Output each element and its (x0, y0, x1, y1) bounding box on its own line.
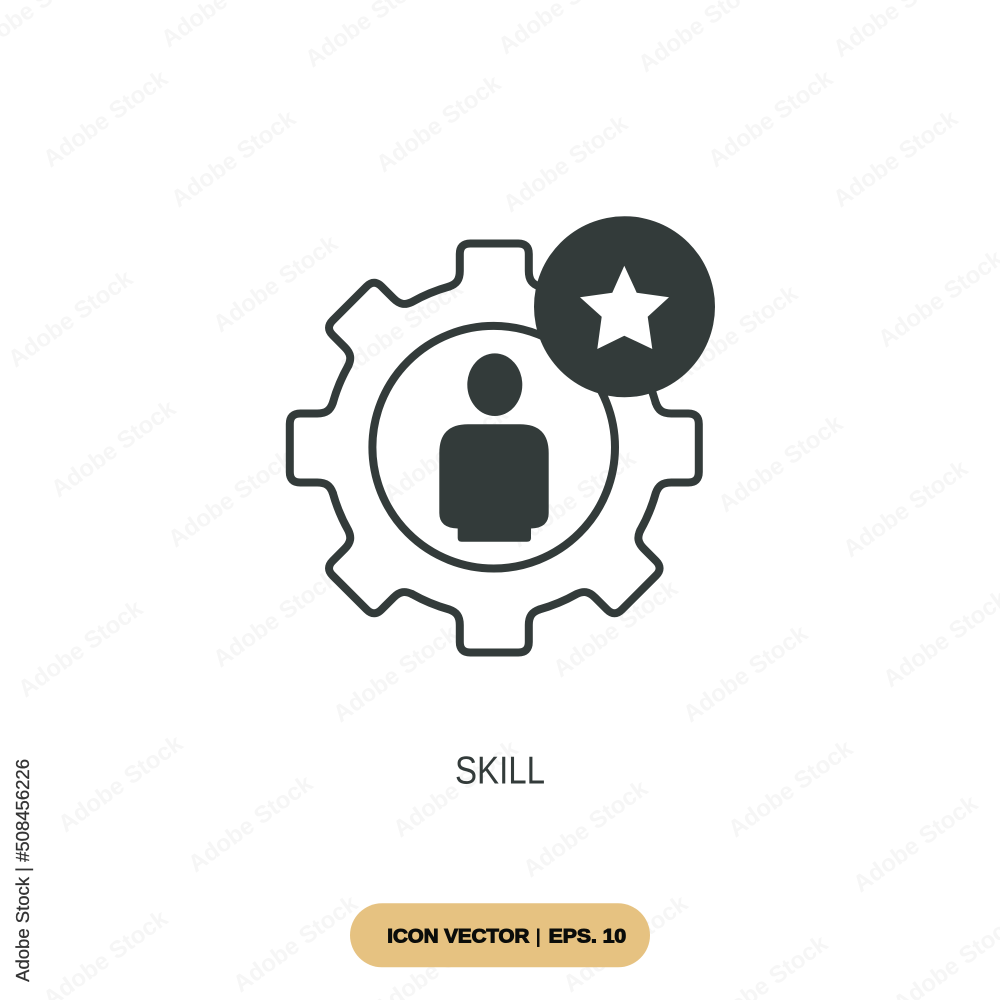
watermark pattern: Adobe Stock (540, 240, 675, 348)
watermark pattern: Adobe Stock (828, 105, 963, 213)
watermark pattern: Adobe Stock (53, 730, 188, 838)
person head (467, 353, 522, 416)
watermark pattern: Adobe Stock (3, 265, 138, 373)
pill text right: EPS. 10 (549, 925, 626, 947)
icon: gear outline (290, 244, 699, 652)
watermark pattern: Adobe Stock (558, 890, 693, 998)
watermark pattern: Adobe Stock (228, 890, 363, 998)
watermark pattern: Adobe Stock (678, 620, 813, 728)
pill separator: | (536, 925, 541, 947)
watermark pattern: Adobe Stock (498, 110, 633, 218)
watermark pattern: Adobe Stock (38, 65, 173, 173)
watermark pattern: Adobe Stock (208, 565, 343, 673)
side credit text: Adobe Stock | #508456226 (12, 759, 33, 982)
person body (439, 424, 549, 542)
watermark pattern: Adobe Stock (723, 735, 858, 843)
watermark pattern: Adobe Stock (668, 280, 803, 388)
watermark pattern: Adobe Stock (183, 770, 318, 878)
icon: person (439, 353, 549, 542)
watermark pattern: Adobe Stock (713, 410, 848, 518)
watermark pattern: Adobe Stock (333, 275, 468, 383)
watermark pattern: Adobe Stock (378, 400, 513, 508)
badge circle (534, 216, 715, 397)
watermark pattern: Adobe Stock (208, 230, 343, 338)
watermark pattern: Adobe Stock (13, 595, 148, 703)
pill background (350, 903, 650, 967)
label: SKILL: SKILL (455, 749, 545, 792)
icon: inner ring (372, 326, 615, 568)
watermark pattern: Adobe Stock (548, 575, 683, 683)
watermark pattern: Adobe Stock (838, 455, 973, 563)
watermark pattern: Adobe Stock (166, 105, 301, 213)
watermark pattern: Adobe Stock (848, 790, 983, 898)
badge: icon vector pill (350, 903, 650, 967)
pill text left: ICON VECTOR (387, 925, 529, 947)
icon: star badge (534, 216, 715, 397)
watermark pattern: Adobe Stock (163, 445, 298, 553)
watermark pattern: Adobe Stock (371, 70, 506, 178)
watermark pattern: Adobe Stock (506, 445, 641, 553)
watermark pattern: Adobe Stock (518, 775, 653, 883)
watermark pattern: Adobe Stock (388, 735, 523, 843)
watermark pattern: Adobe Stock (703, 65, 838, 173)
white star (580, 266, 669, 349)
watermark pattern: Adobe Stock (328, 620, 463, 728)
watermark pattern: Adobe Stock (46, 395, 181, 503)
